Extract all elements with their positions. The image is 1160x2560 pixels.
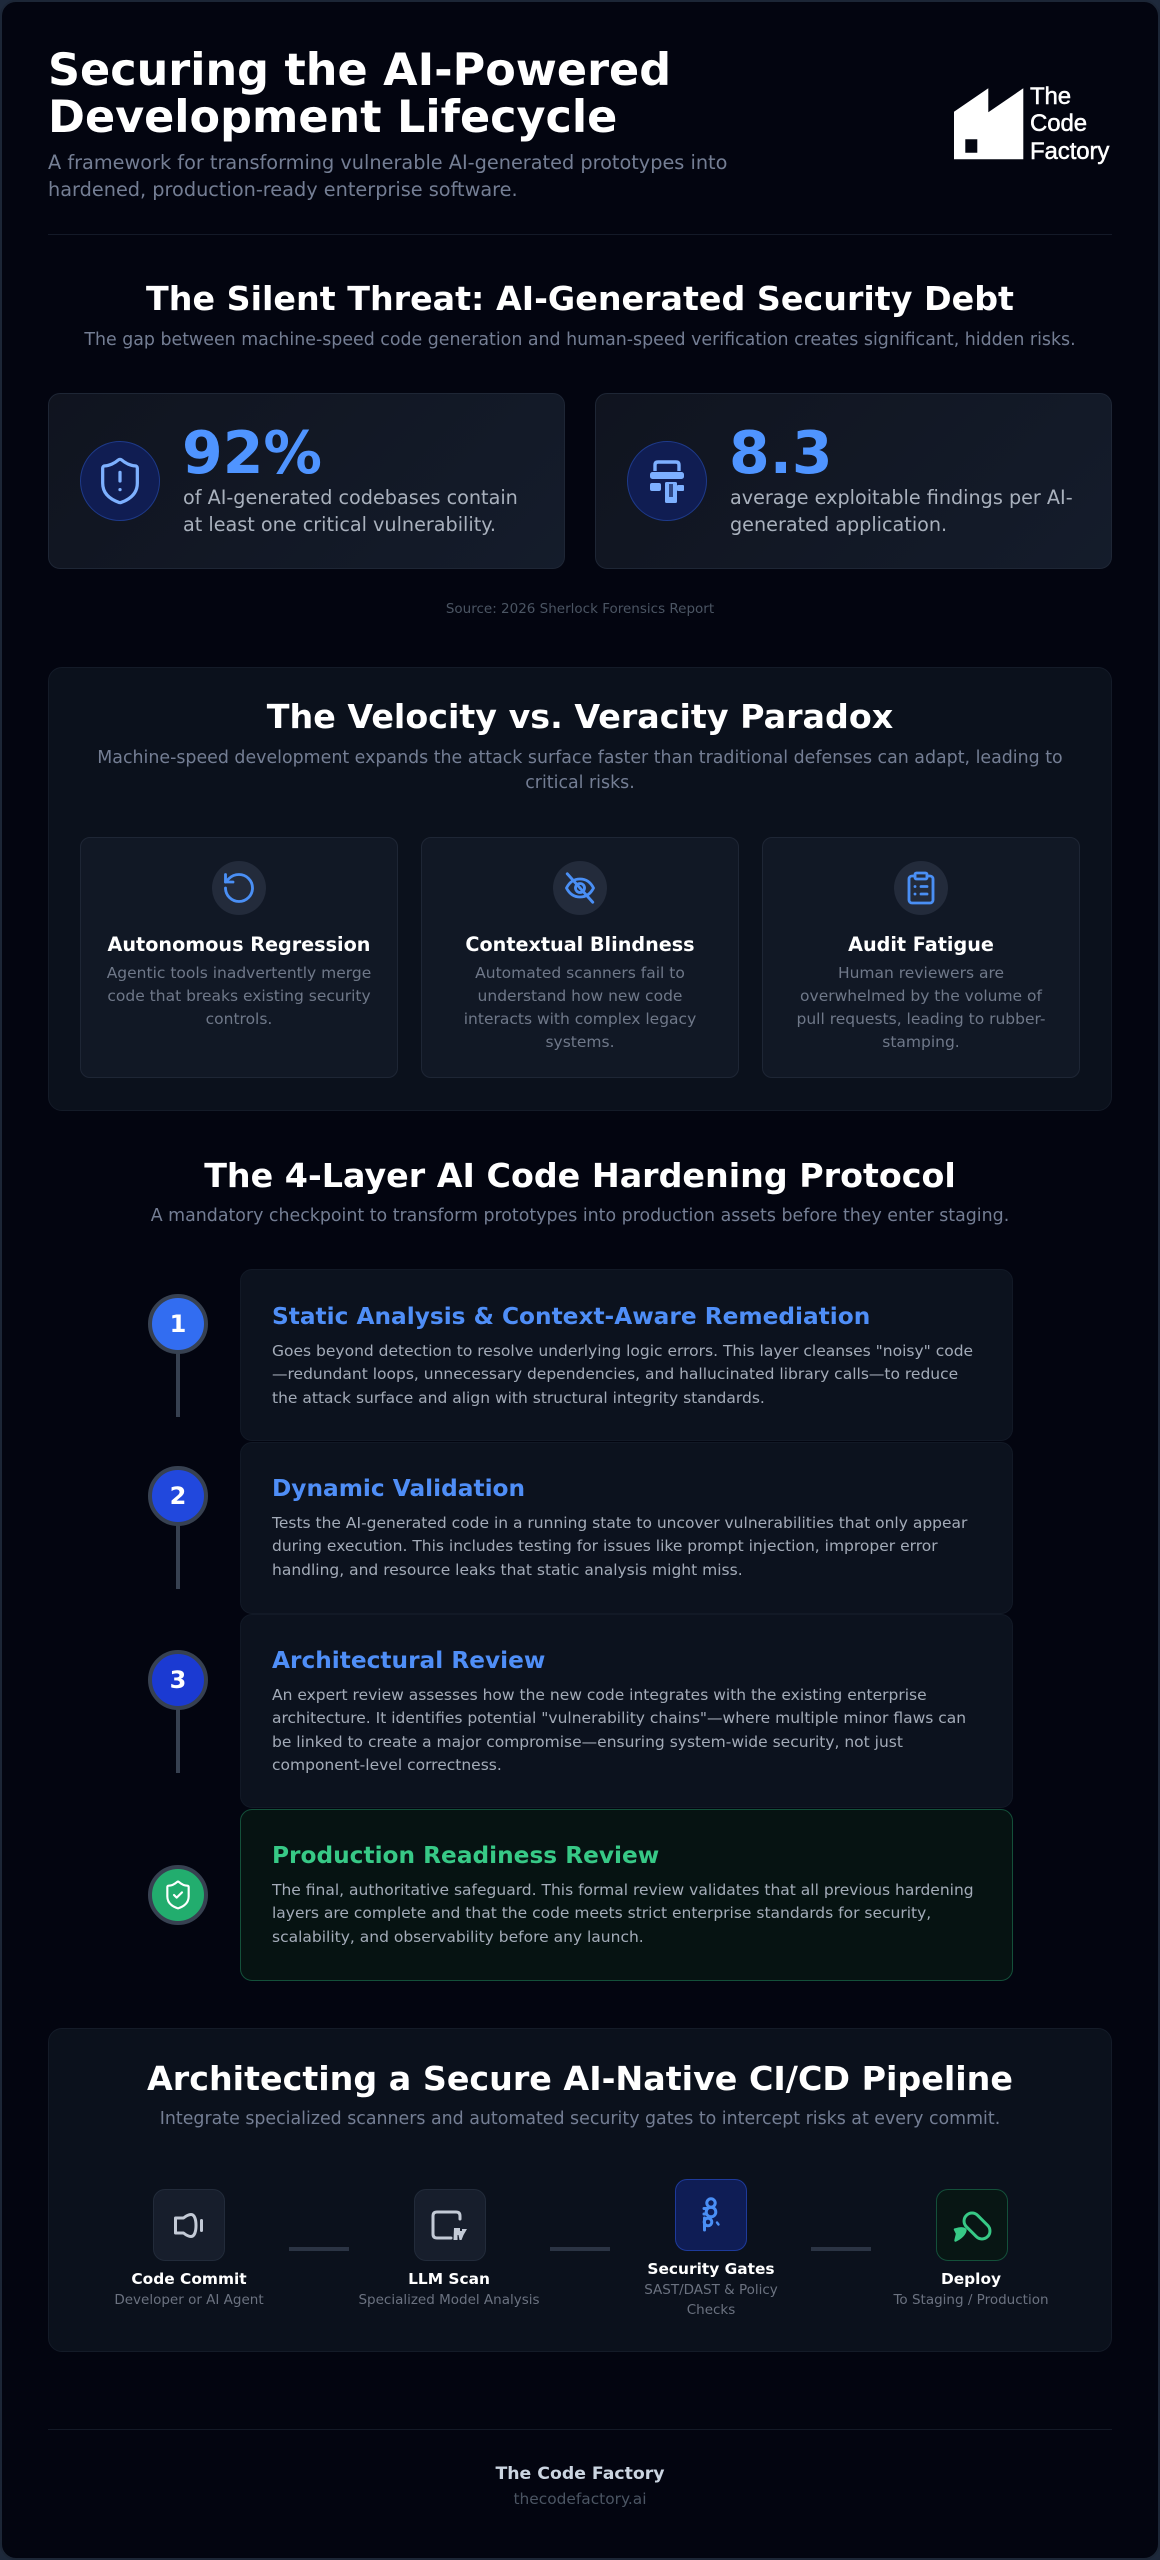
section heading: silent threat: The Silent Threat: AI-Generated Security Debt (146, 279, 1014, 318)
icon: scan (414, 2189, 486, 2261)
step description: Goes beyond detection to resolve underlying logic errors. This layer cleanses "noisy" code (272, 1342, 973, 1360)
card description: interacts with complex legacy (464, 1010, 696, 1028)
step description: The final, authoritative safeguard. This formal review validates that all previous hardening (272, 1881, 974, 1899)
header subtitle: hardened, production-ready enterprise software. (48, 178, 518, 201)
connector (289, 2247, 349, 2251)
sublabel: Checks (687, 2302, 735, 2318)
panel: pipeline (48, 2028, 1112, 2352)
card description (107, 964, 371, 1028)
connector line 1 (176, 1350, 180, 1417)
icon: rotate (212, 861, 266, 915)
stat card: 92% (48, 393, 565, 569)
logo: The Code Factory: The (1030, 83, 1071, 110)
connector (811, 2247, 871, 2251)
step card: production readiness (240, 1809, 1013, 1981)
step marker: final shield (148, 1865, 208, 1925)
pipeline step: security gates (644, 2179, 778, 2318)
step marker 3: 3 (170, 1666, 186, 1694)
card description: Automated scanners fail to (475, 964, 685, 982)
card description (464, 964, 696, 1051)
header subtitle: A framework for transforming vulnerable AI-generated prototypes into (48, 151, 727, 174)
card: autonomous regression (80, 837, 398, 1078)
stat text: 92% (183, 486, 518, 536)
icon: shield alert (80, 441, 160, 521)
card description: controls. (206, 1010, 272, 1028)
card title: Audit Fatigue (848, 933, 994, 956)
stat text: 92%: at least one critical vulnerability. (183, 513, 496, 536)
step description (272, 1342, 973, 1407)
icon: commit (153, 2189, 225, 2261)
connector line 2 (176, 1522, 180, 1589)
sublabel: Developer or AI Agent (114, 2292, 264, 2308)
sublabel (644, 2282, 778, 2318)
connector line 3 (176, 1706, 180, 1773)
connector (550, 2247, 610, 2251)
card description: code that breaks existing security (107, 987, 371, 1005)
section subtitle: pipeline: Integrate specialized scanners and automated security gates to intercept risks at every commit. (160, 2109, 1000, 2129)
card description: stamping. (882, 1033, 960, 1051)
logo: The Code Factory: Factory (1030, 138, 1109, 165)
card: audit fatigue (762, 837, 1080, 1078)
logo: The Code Factory: Code (1030, 110, 1087, 137)
footer url: thecodefactory.ai (514, 2490, 646, 2508)
step description: component-level correctness. (272, 1756, 502, 1774)
step marker 3 (148, 1650, 208, 1710)
section subtitle: silent threat: The gap between machine-speed code generation and human-speed verification creates significant, hidden risks. (84, 330, 1076, 350)
step description: the attack surface and align with structural integrity standards. (272, 1389, 765, 1407)
card description: Agentic tools inadvertently merge (107, 964, 371, 982)
card description: understand how new code (478, 987, 682, 1005)
label: LLM Scan (408, 2270, 490, 2288)
header title (48, 45, 671, 142)
card title: Autonomous Regression (108, 933, 370, 956)
stat number: 92%: 92% (182, 419, 322, 487)
section subtitle: paradox (97, 748, 1063, 793)
source note: Source: 2026 Sherlock Forensics Report (446, 601, 714, 617)
section subtitle: protocol: A mandatory checkpoint to transform prototypes into production assets before they enter staging. (151, 1206, 1009, 1226)
step description: handling, and resource leaks that static analysis might miss. (272, 1561, 743, 1579)
step description: architecture. It identifies potential "vulnerability chains"—where multiple minor flaws can (272, 1709, 966, 1727)
section heading: pipeline: Architecting a Secure AI-Native CI/CD Pipeline (147, 2059, 1013, 2098)
step marker 2 (148, 1466, 208, 1526)
step title: Architectural Review (272, 1647, 545, 1674)
pipeline step: deploy (893, 2189, 1049, 2308)
header title: Development Lifecycle (48, 92, 617, 142)
stat text: 92%: of AI-generated codebases contain (183, 486, 518, 509)
card description: systems. (545, 1033, 615, 1051)
panel: velocity vs veracity (48, 667, 1112, 1111)
logo: The Code Factory (954, 83, 1110, 165)
section heading: paradox: The Velocity vs. Veracity Paradox (267, 697, 893, 736)
sublabel: SAST/DAST & Policy (644, 2282, 778, 2298)
icon: bug findings (627, 441, 707, 521)
step description: layers are complete and that the code meets strict enterprise standards for security, (272, 1904, 931, 1922)
card description: Human reviewers are (838, 964, 1004, 982)
step card 3 (240, 1614, 1013, 1808)
icon: clipboard (894, 861, 948, 915)
label: Security Gates (647, 2260, 775, 2278)
step card 2 (240, 1442, 1013, 1614)
step description (272, 1881, 974, 1946)
sublabel: Specialized Model Analysis (358, 2292, 540, 2308)
step description (272, 1514, 968, 1579)
footer name: The Code Factory (495, 2464, 665, 2484)
stat text: 8.3 (730, 486, 1073, 536)
stat number: 8.3: 8.3 (729, 419, 833, 487)
step description: be linked to create a major compromise—ensuring system-wide security, not just (272, 1733, 903, 1751)
step marker 1: 1 (170, 1310, 186, 1338)
step title: Production Readiness Review (272, 1842, 659, 1869)
pipeline step: code commit (114, 2189, 264, 2308)
stat text: 8.3: average exploitable findings per AI- (730, 486, 1073, 509)
pipeline step: llm scan (358, 2189, 540, 2308)
step description: —redundant loops, unnecessary dependencies, and hallucinated library calls—to reduce (272, 1365, 958, 1383)
step description: scalability, and observability before any launch. (272, 1928, 644, 1946)
stat text: 8.3: generated application. (730, 513, 947, 536)
header subtitle (48, 151, 727, 201)
step description (272, 1686, 966, 1774)
step marker 1 (148, 1294, 208, 1354)
label: Code Commit (131, 2270, 247, 2288)
header title: Securing the AI-Powered (48, 45, 671, 96)
sublabel: To Staging / Production (893, 2292, 1049, 2308)
step description: during execution. This includes testing for issues like prompt injection, improper error (272, 1537, 938, 1555)
section heading: protocol: The 4-Layer AI Code Hardening Protocol (204, 1156, 956, 1195)
step card 1 (240, 1269, 1013, 1441)
card title: Contextual Blindness (465, 933, 695, 956)
step title: Dynamic Validation (272, 1475, 525, 1502)
card: contextual blindness (421, 837, 739, 1078)
icon: eye off (553, 861, 607, 915)
icon: deploy (936, 2189, 1008, 2261)
section subtitle: paradox: critical risks. (525, 773, 635, 793)
step description: An expert review assesses how the new code integrates with the existing enterprise (272, 1686, 927, 1704)
card description (796, 964, 1046, 1051)
section subtitle: paradox: Machine-speed development expands the attack surface faster than traditional defenses can adapt, leading to (97, 748, 1063, 768)
card description: overwhelmed by the volume of (800, 987, 1042, 1005)
icon: gates (675, 2179, 747, 2251)
step title: Static Analysis & Context-Aware Remediation (272, 1303, 870, 1330)
stat card: 8.3 (595, 393, 1112, 569)
label: Deploy (941, 2270, 1001, 2288)
step description: Tests the AI-generated code in a running state to uncover vulnerabilities that only appear (272, 1514, 967, 1532)
step marker 2: 2 (170, 1482, 186, 1510)
card description: pull requests, leading to rubber- (796, 1010, 1046, 1028)
